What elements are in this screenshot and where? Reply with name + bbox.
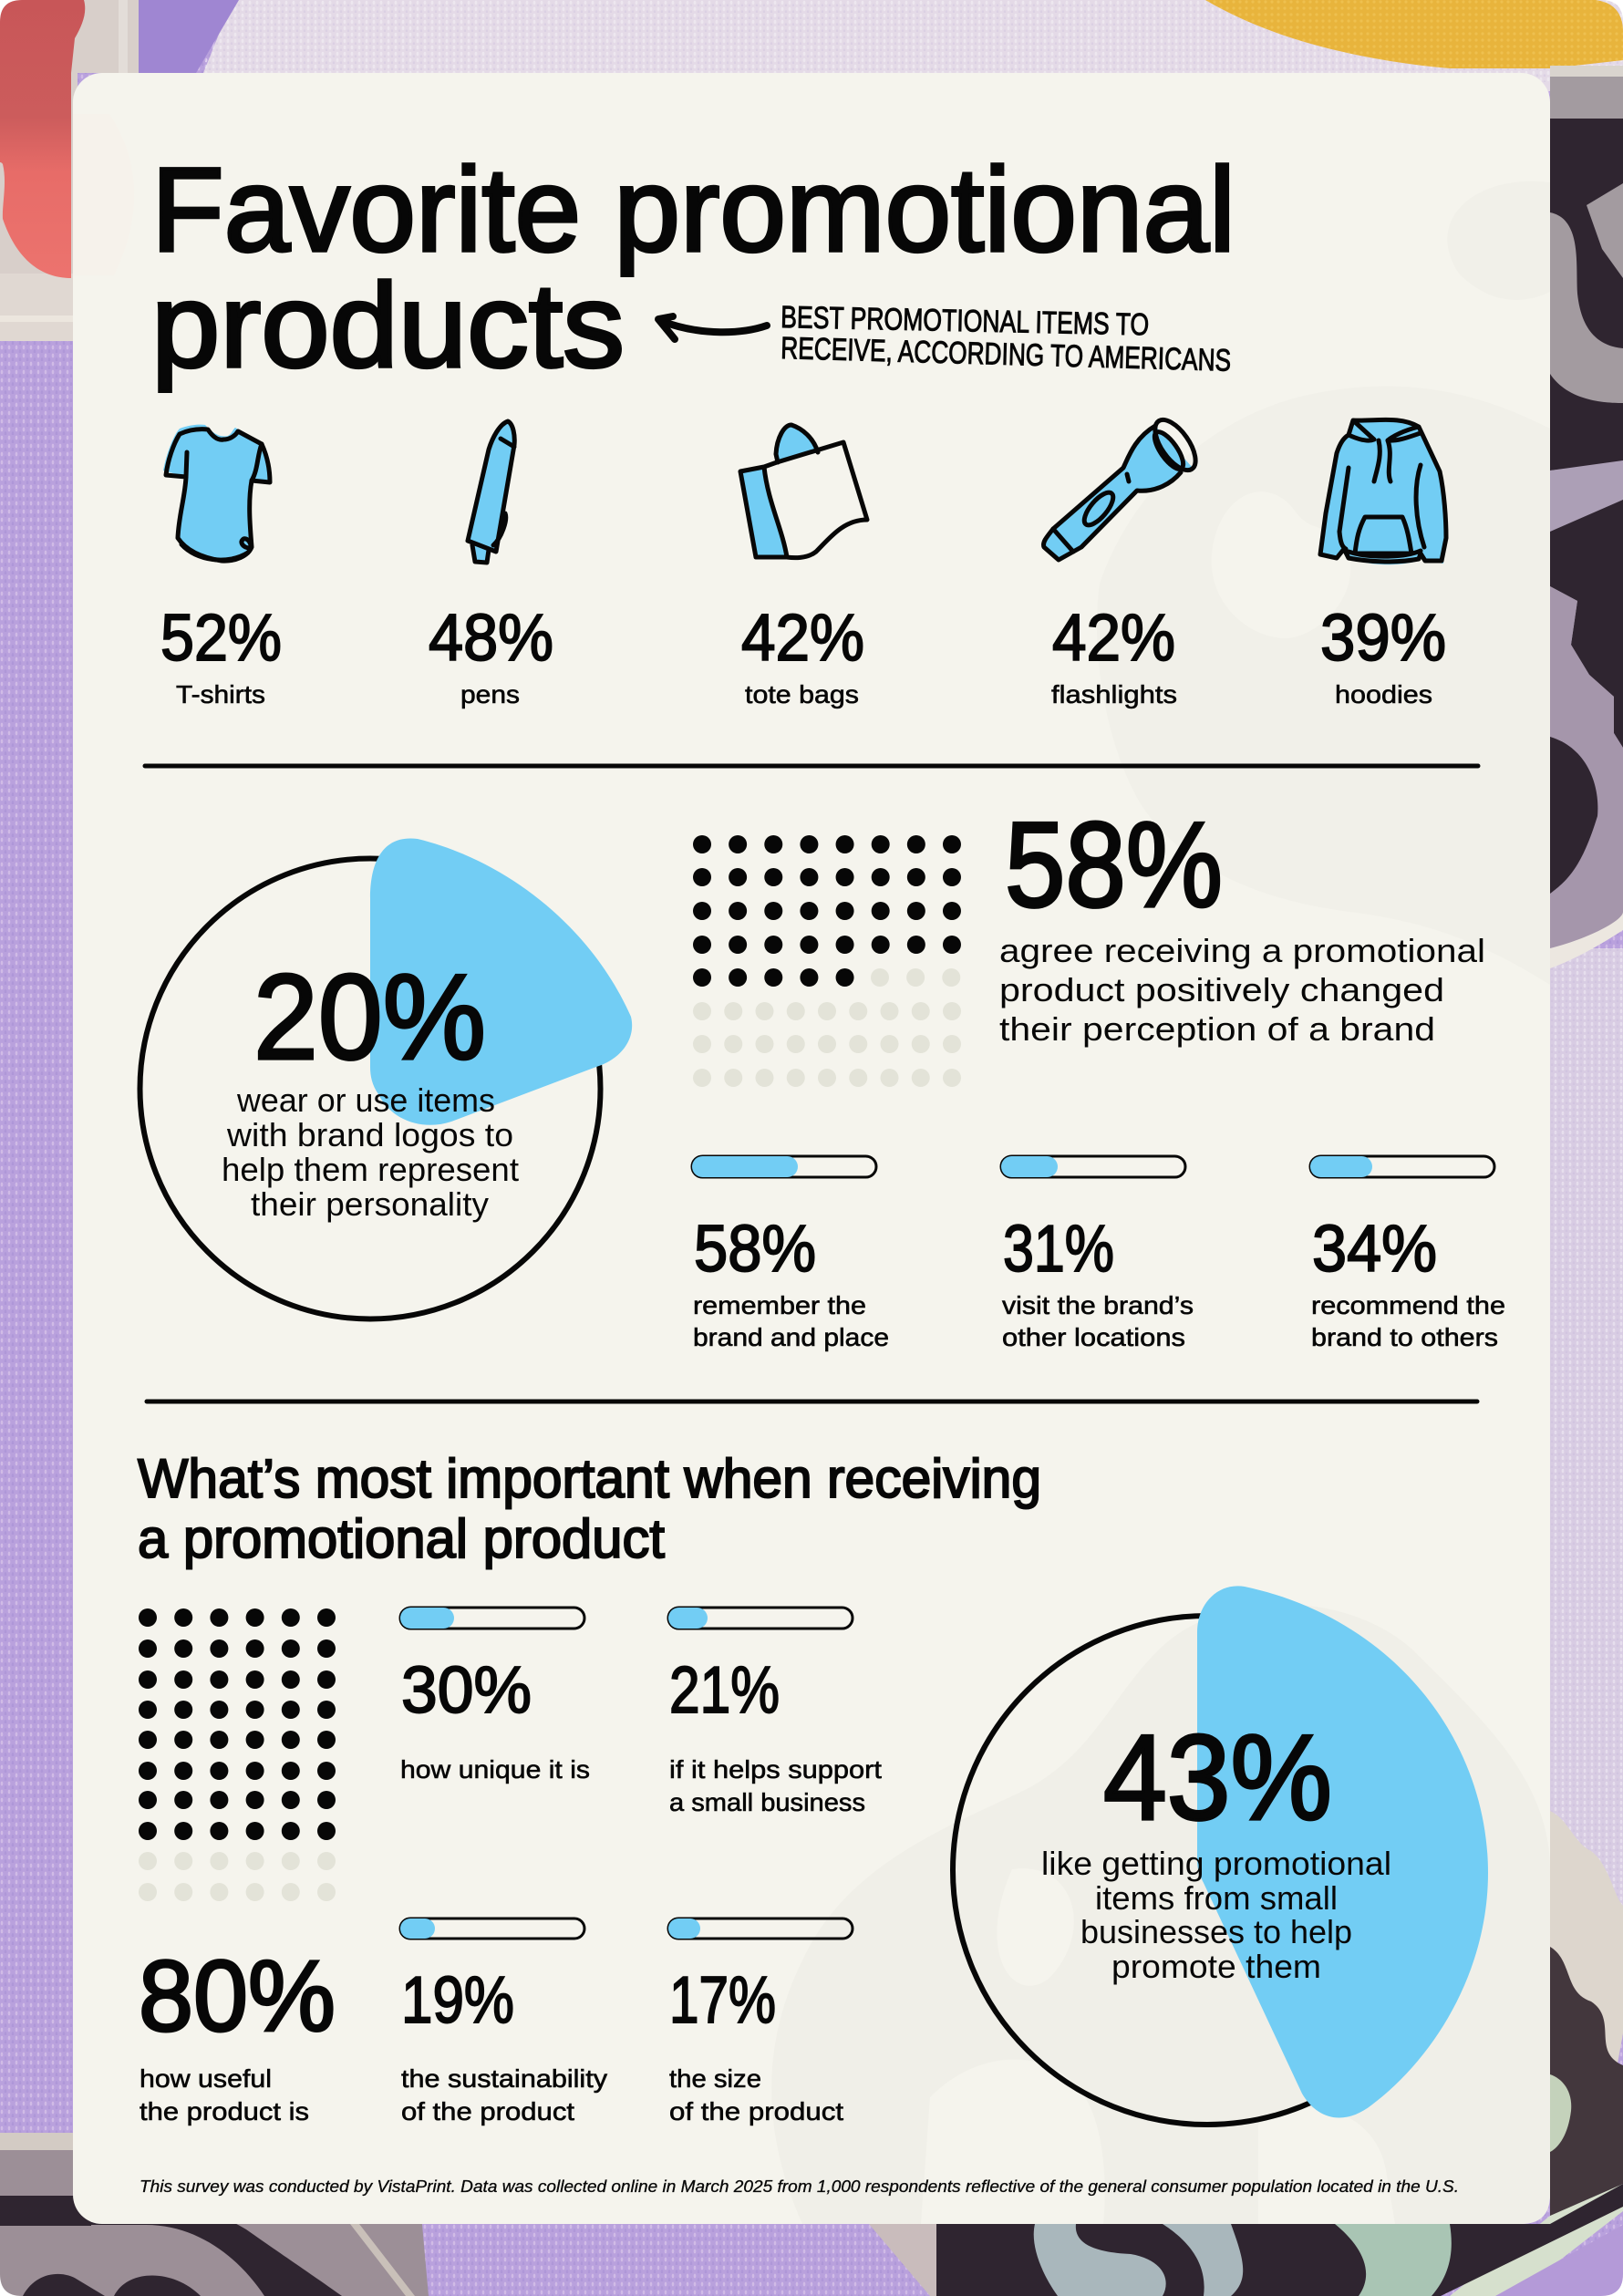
chart: 58% dot grid	[702, 844, 957, 1078]
stat: 58% perception: their perception of a brand	[999, 1010, 1435, 1048]
stat: 80% useful with dot grid: the product is	[140, 2097, 309, 2125]
stat: 31% visit: visit the brand’s	[1002, 1291, 1194, 1319]
chart: 43% pie callout: like getting promotional	[1041, 1845, 1391, 1882]
stat: tote bags: tote bags	[745, 680, 859, 708]
stat: 34% recommend: recommend the	[1311, 1291, 1505, 1319]
icon: tote bag	[740, 425, 867, 558]
stat: 80% useful with dot grid: how useful	[140, 2064, 272, 2093]
chart: 20% pie callout: help them represent	[222, 1151, 519, 1188]
title	[151, 142, 1235, 392]
icon: hoodie	[1320, 419, 1446, 564]
stat: flashlights: 42%	[1052, 602, 1175, 675]
stat: 58% remember: 58%	[694, 1213, 816, 1286]
chart: 43% pie callout	[953, 1586, 1488, 2125]
stat: 31% visit	[1001, 1156, 1194, 1351]
stat: 19% sustainability: 19%	[401, 1964, 514, 2037]
stat: flashlights: flashlights	[1051, 680, 1177, 708]
stat: 21% small business	[668, 1608, 882, 1816]
icon: pen	[468, 421, 514, 563]
stat: 30% unique	[400, 1608, 590, 1784]
stat: t-shirts	[160, 602, 282, 708]
chart: 20% pie callout	[140, 838, 632, 1319]
chart: 43% pie callout: promote them	[1111, 1948, 1321, 1985]
stat: hoodies: 39%	[1320, 602, 1446, 675]
stat: 80% useful with dot grid: 80%	[139, 1940, 336, 2053]
stat: 58% remember	[692, 1156, 889, 1351]
handwritten subtitle: BEST PROMOTIONAL ITEMS TO	[780, 300, 1150, 342]
stat: pens: 48%	[429, 602, 553, 675]
stat: 58% perception	[999, 798, 1485, 1048]
stat: 19% sustainability	[400, 1919, 607, 2125]
stat: tote bags: 42%	[741, 602, 864, 675]
stat: pens	[429, 602, 553, 708]
stat: tote bags	[741, 602, 864, 708]
stat: 17% size: 17%	[669, 1964, 776, 2037]
stat: 58% perception: 58%	[1005, 798, 1223, 933]
chart: 43% pie callout: items from small	[1095, 1879, 1338, 1917]
stat: 30% unique: 30%	[401, 1654, 532, 1727]
stat: t-shirts: 52%	[160, 602, 282, 675]
panel: favorite items row	[160, 413, 1446, 708]
stat: 21% small business: 21%	[669, 1654, 780, 1727]
stat: 58% remember: remember the	[693, 1291, 866, 1319]
arrow pointing at title	[658, 316, 767, 339]
icon: flashlight	[1043, 413, 1204, 560]
stat: 19% sustainability: the sustainability	[401, 2064, 607, 2093]
chart: 20% pie callout: their personality	[251, 1185, 489, 1223]
stat: 19% sustainability: of the product	[401, 2097, 574, 2125]
stat: 34% recommend: 34%	[1312, 1213, 1437, 1286]
chart: 43% pie callout: 43%	[1103, 1711, 1332, 1846]
section heading: a promotional product	[138, 1508, 665, 1569]
chart: 20% pie callout: wear or use items	[236, 1081, 495, 1119]
section heading	[138, 1448, 1041, 1569]
title: products	[151, 258, 625, 392]
stat: 30% unique: how unique it is	[400, 1755, 590, 1784]
title: Favorite promotional	[151, 142, 1235, 276]
stat: 58% perception: agree receiving a promotional	[999, 932, 1485, 969]
stat: 34% recommend	[1310, 1156, 1505, 1351]
handwritten subtitle	[780, 300, 1232, 378]
stat: pens: pens	[460, 680, 520, 708]
stat: 80% useful with dot grid	[139, 1618, 336, 2125]
stat: 58% remember: brand and place	[693, 1323, 889, 1351]
stat: 34% recommend: brand to others	[1311, 1323, 1498, 1351]
handwritten subtitle: RECEIVE, ACCORDING TO AMERICANS	[780, 331, 1232, 378]
icon: t-shirt	[163, 425, 270, 561]
stat: 21% small business: a small business	[669, 1788, 865, 1816]
footnote: This survey was conducted by VistaPrint. Data was collected online in March 2025 from 1,000 respondents reflective of the general consumer population located in the U.S.	[140, 2177, 1459, 2196]
stat: hoodies: hoodies	[1335, 680, 1432, 708]
stat: hoodies	[1320, 602, 1446, 708]
stat: t-shirts: T-shirts	[176, 680, 265, 708]
chart: 43% pie callout: businesses to help	[1080, 1913, 1352, 1950]
chart: 20% pie callout: 20%	[253, 950, 486, 1085]
stat: flashlights	[1051, 602, 1177, 708]
stat: 21% small business: if it helps support	[669, 1755, 882, 1784]
chart: 20% pie callout: with brand logos to	[226, 1116, 513, 1153]
section heading: What’s most important when receiving	[138, 1448, 1041, 1509]
stat: 31% visit: 31%	[1003, 1213, 1114, 1286]
stat: 17% size	[668, 1919, 853, 2125]
stat: 31% visit: other locations	[1002, 1323, 1185, 1351]
stat: 17% size: the size	[669, 2064, 761, 2093]
stat: 17% size: of the product	[669, 2097, 843, 2125]
stat: 58% perception: product positively changed	[999, 971, 1444, 1008]
